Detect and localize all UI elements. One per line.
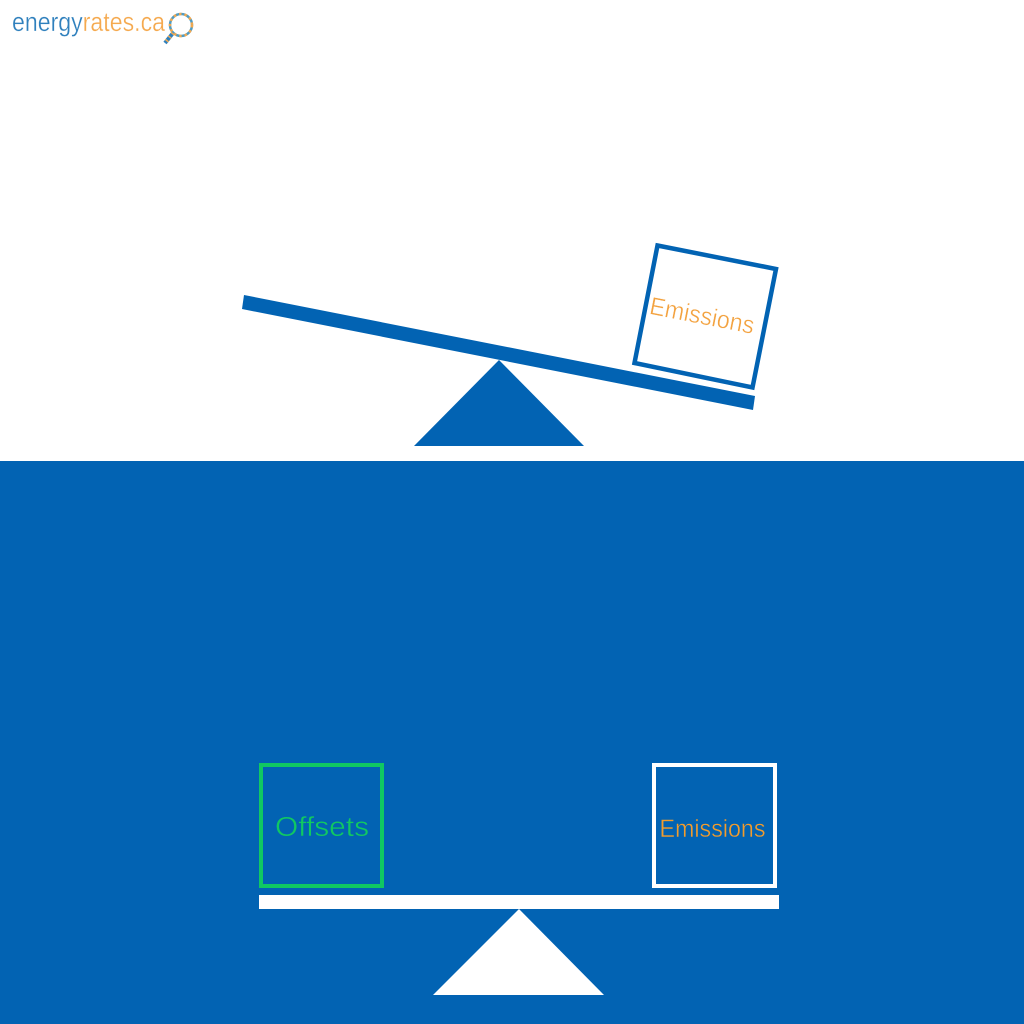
offsets label: Offsets <box>275 811 369 842</box>
emissions box tilted <box>634 246 776 388</box>
offsets box <box>261 765 382 886</box>
icon: magnifying glass <box>165 14 192 43</box>
fulcrum triangle <box>433 909 604 995</box>
panel: balanced scale on blue <box>0 461 1024 1024</box>
emissions label tilted: Emissions <box>647 292 757 340</box>
fulcrum triangle <box>414 360 584 446</box>
logo wordmark: energyrates.ca <box>12 7 166 37</box>
tilted beam <box>242 295 755 410</box>
logo: energyrates.ca <box>12 7 192 43</box>
level beam <box>259 895 779 909</box>
emissions label: Emissions <box>660 815 766 843</box>
emissions box <box>654 765 775 886</box>
panel: unbalanced scale on white <box>0 0 1024 461</box>
